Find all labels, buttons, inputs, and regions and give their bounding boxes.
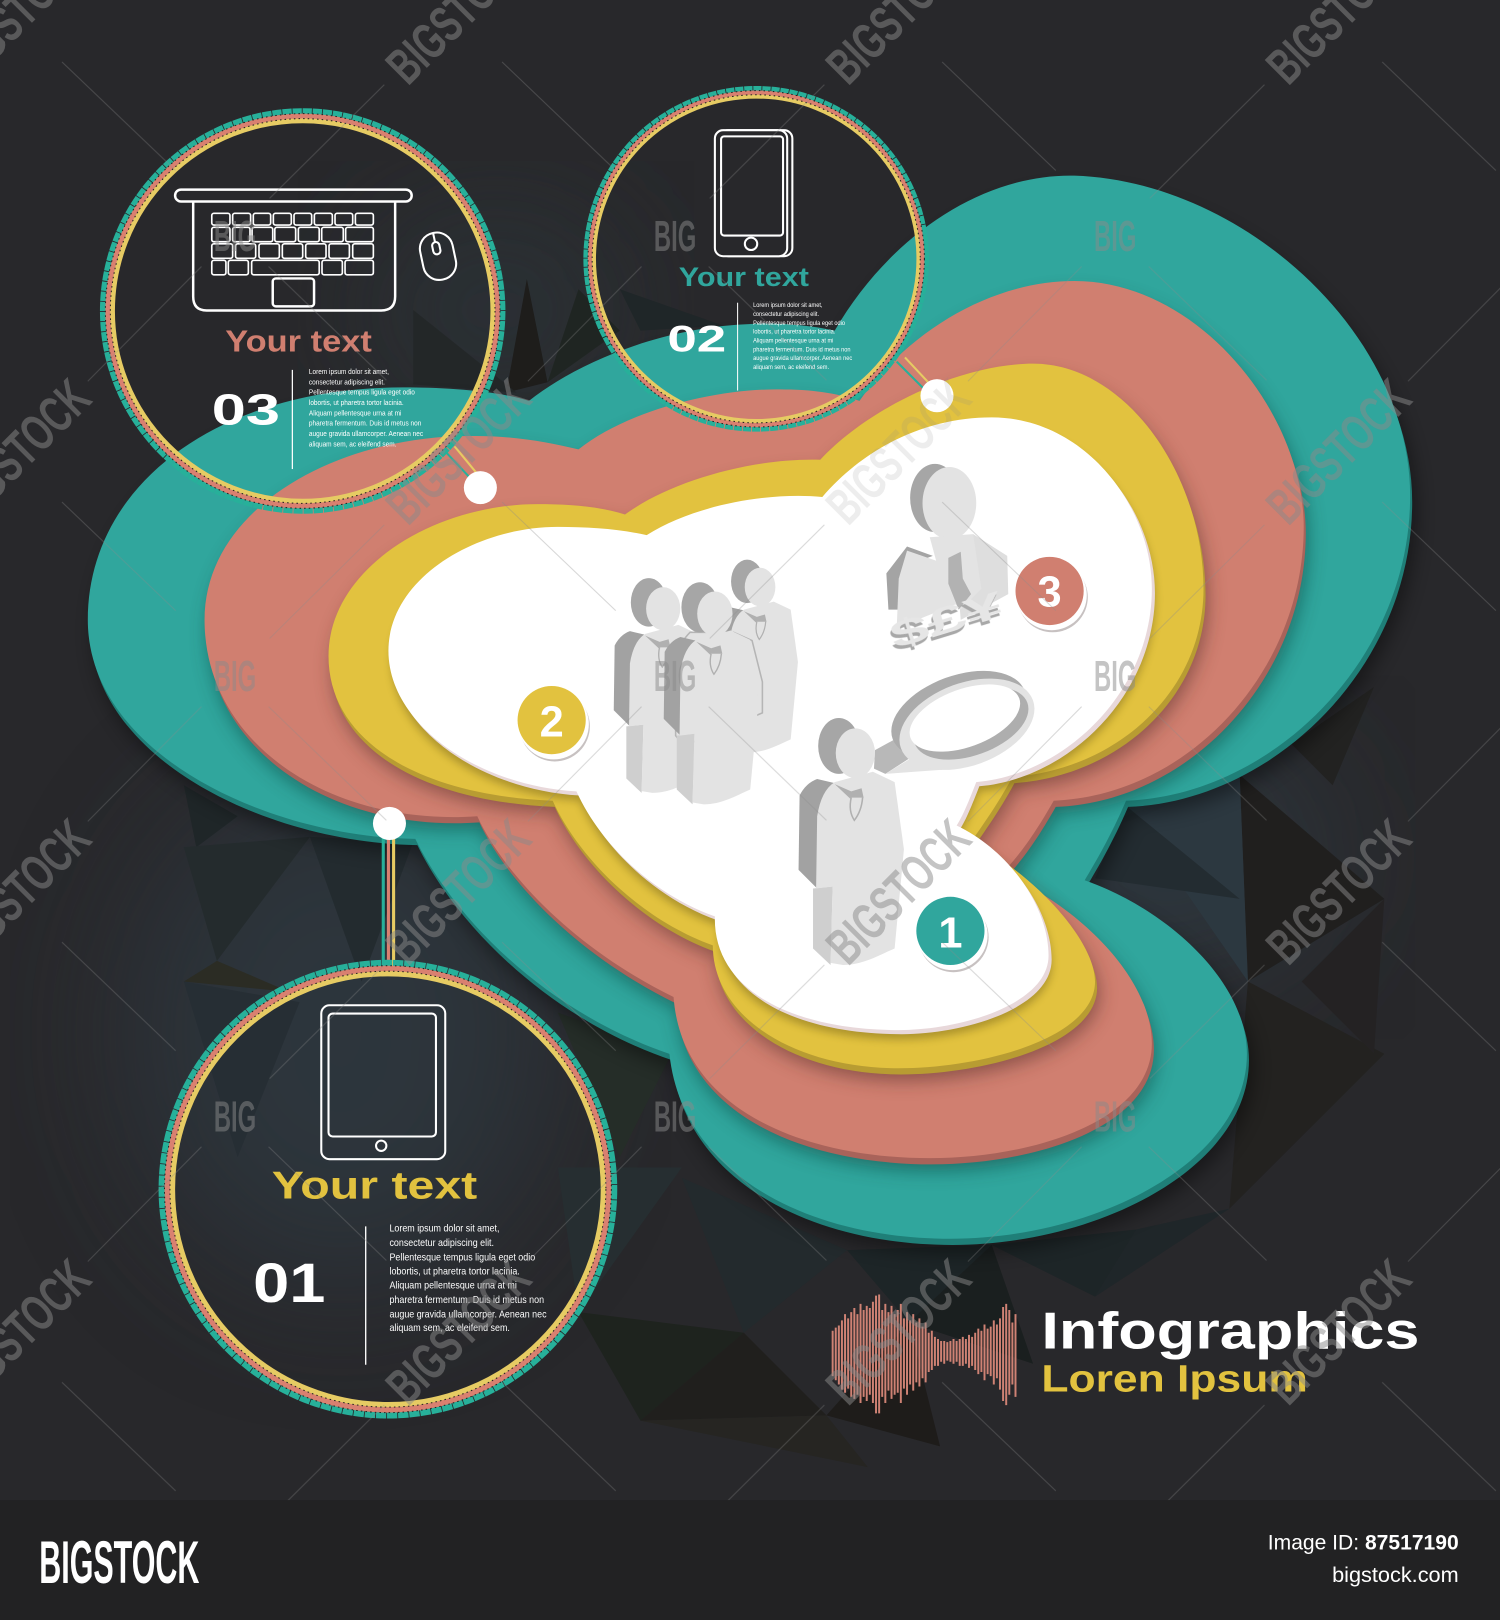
text block 02: lobortis, ut pharetra tortor lacinia. <box>753 329 836 336</box>
watermarks: BIG <box>214 653 256 701</box>
icon: tablet <box>321 1005 445 1159</box>
text block 03: Aliquam pellentesque urna at mi <box>309 409 402 417</box>
watermarks: BIG <box>654 1093 696 1141</box>
watermarks: BIG <box>1094 213 1136 261</box>
heading 03: Your text <box>225 323 372 358</box>
text block 03: Pellentesque tempus ligula eget odio <box>309 388 415 397</box>
watermarks: BIG <box>654 213 696 261</box>
panel: circle 03 laptop <box>103 111 503 511</box>
text block 01 <box>366 1222 547 1365</box>
text block 03: consectetur adipiscing elit. <box>309 378 385 386</box>
text block 03: aliquam sem, ac eleifend sem. <box>309 440 396 448</box>
text block 03: Lorem ipsum dolor sit amet, <box>309 368 389 376</box>
icon: three-person group <box>614 560 798 804</box>
connector: circle 02 to dot <box>897 357 954 412</box>
icon: laptop <box>175 190 412 310</box>
site url: bigstock.com <box>1332 1562 1459 1587</box>
text block 03: lobortis, ut pharetra tortor lacinia. <box>309 399 404 407</box>
heading 01: Your text <box>272 1163 477 1207</box>
footer bar <box>0 1500 1500 1620</box>
text block 03: augue gravida ullamcorper. Aenean nec <box>309 430 424 438</box>
icon: mouse <box>417 230 459 283</box>
panel: yellow cloud layer <box>329 364 1208 1081</box>
text block 02: consectetur adipiscing elit. <box>753 312 819 318</box>
watermarks: BIGSTOCK <box>815 808 982 975</box>
background low-poly triangles <box>134 217 1384 1467</box>
watermarks: BIG <box>1094 1093 1136 1141</box>
heading 02: Your text <box>679 262 809 292</box>
badge 2 <box>518 686 590 761</box>
ring 03 <box>103 111 503 511</box>
text block 02: pharetra fermentum. Duis id metus non <box>753 347 851 353</box>
text block 03: pharetra fermentum. Duis id metus non <box>309 419 421 428</box>
badge 1 <box>916 897 989 972</box>
ring 02 <box>586 88 927 429</box>
text block 03 <box>292 368 424 469</box>
panel: white cloud layer <box>388 417 1155 1039</box>
connector: circle 01 to dot <box>373 807 406 966</box>
watermarks: BIG <box>654 653 696 701</box>
image id: Image ID: 87517190 <box>1268 1532 1459 1555</box>
watermarks: BIG <box>214 213 256 261</box>
panel: salmon cloud layer <box>205 281 1308 1171</box>
text block 01: Lorem ipsum dolor sit amet, <box>389 1222 499 1234</box>
text block 01: augue gravida ullamcorper. Aenean nec <box>389 1308 547 1319</box>
text block 01: pharetra fermentum. Duis id metus non <box>389 1293 544 1305</box>
badge 3 <box>1015 557 1088 632</box>
icon: person with speech bubble <box>799 654 1047 965</box>
watermarks: BIGSTOCK <box>375 1248 541 1415</box>
icon: phone <box>715 130 792 256</box>
text block 01: lobortis, ut pharetra tortor lacinia. <box>389 1265 520 1277</box>
number 01: 01 <box>253 1252 325 1314</box>
panel: circle 02 phone <box>586 88 927 429</box>
watermarks: BIGSTOCK <box>1255 1248 1422 1415</box>
watermarks: BIGSTOCK <box>815 368 982 535</box>
text block 02: aliquam sem, ac eleifend sem. <box>753 365 829 371</box>
text block 01: Aliquam pellentesque urna at mi <box>389 1279 517 1290</box>
icon: sound waveform <box>833 1295 1015 1413</box>
connector: circle 03 to dot <box>446 446 497 504</box>
text block 02: Pellentesque tempus ligula eget odio <box>753 321 846 327</box>
text block 01: Pellentesque tempus ligula eget odio <box>389 1251 535 1263</box>
number 02: 02 <box>667 317 726 359</box>
watermarks: BIG <box>1094 653 1136 701</box>
watermarks: BIGSTOCK <box>375 808 541 975</box>
watermarks: BIGSTOCK <box>375 368 541 535</box>
badge 2: 2 <box>540 699 564 747</box>
text block 02: augue gravida ullamcorper. Aenean nec <box>753 356 852 362</box>
watermarks: BIGSTOCK <box>1255 808 1422 975</box>
text block 01: aliquam sem, ac eleifend sem. <box>389 1322 510 1333</box>
panel: teal cloud layer <box>88 176 1416 1253</box>
panel: circle 01 tablet <box>162 963 614 1415</box>
title: Infographics: Infographics <box>1041 1301 1419 1359</box>
text block 02 <box>738 303 852 391</box>
watermarks: BIG <box>214 1093 256 1141</box>
text block 01: consectetur adipiscing elit. <box>389 1237 494 1248</box>
subtitle: Loren Ipsum: Loren Ipsum <box>1041 1358 1308 1401</box>
icon: person with currency symbols: $£¥ <box>885 582 1008 656</box>
watermarks: BIGSTOCK <box>1255 368 1422 535</box>
number 03: 03 <box>212 387 280 435</box>
icon: person with currency symbols <box>885 464 1008 656</box>
footer logo: BIGSTOCK <box>39 1529 199 1596</box>
badge 1: 1 <box>938 909 962 957</box>
watermarks: BIGSTOCK <box>815 1248 982 1415</box>
text block 02: Aliquam pellentesque urna at mi <box>753 338 833 345</box>
text block 02: Lorem ipsum dolor sit amet, <box>753 303 823 309</box>
badge 3: 3 <box>1038 568 1062 616</box>
ring 01 <box>162 963 614 1415</box>
